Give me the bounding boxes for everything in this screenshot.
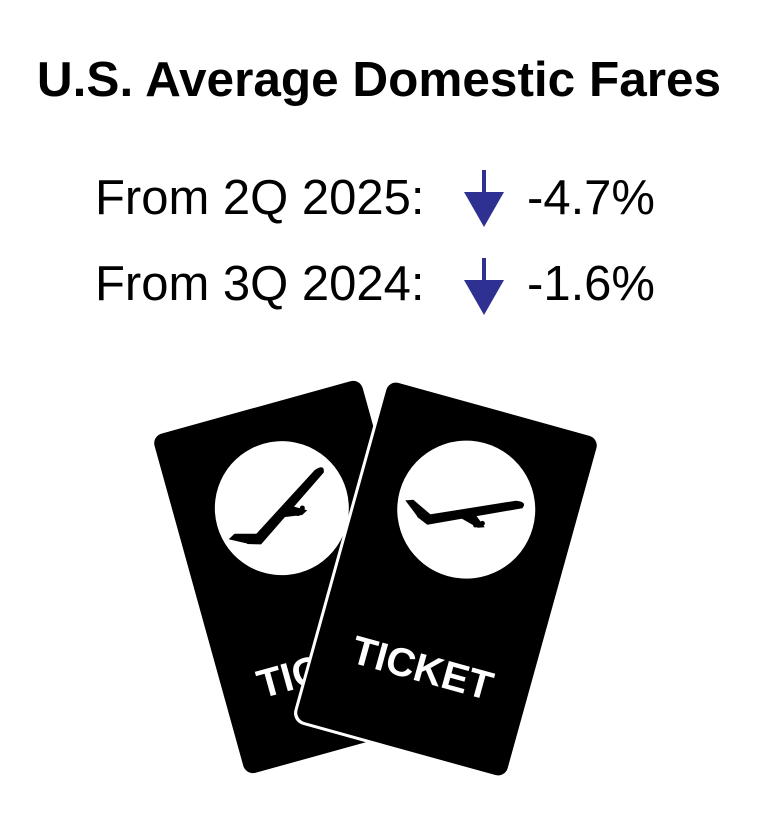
row: from 3Q 2024: -1.6% (527, 257, 655, 311)
icon: down arrow (464, 258, 504, 315)
ticket: right (291, 377, 603, 781)
ticket: left (152, 379, 454, 775)
title: U.S. Average Domestic Fares (37, 52, 721, 107)
icon: down arrow (464, 170, 504, 227)
icon: plane climbing (229, 458, 337, 563)
row: from 3Q 2024 (95, 257, 655, 315)
row: from 2Q 2025: -4.7% (527, 171, 655, 225)
row: from 3Q 2024: From 3Q 2024: (95, 257, 425, 311)
row: from 2Q 2025: From 2Q 2025: (95, 171, 425, 225)
ticket: left: TICKET (252, 626, 403, 707)
icon: plane (405, 491, 526, 533)
row: from 2Q 2025 (95, 170, 655, 227)
ticket: right: TICKET (347, 628, 498, 709)
